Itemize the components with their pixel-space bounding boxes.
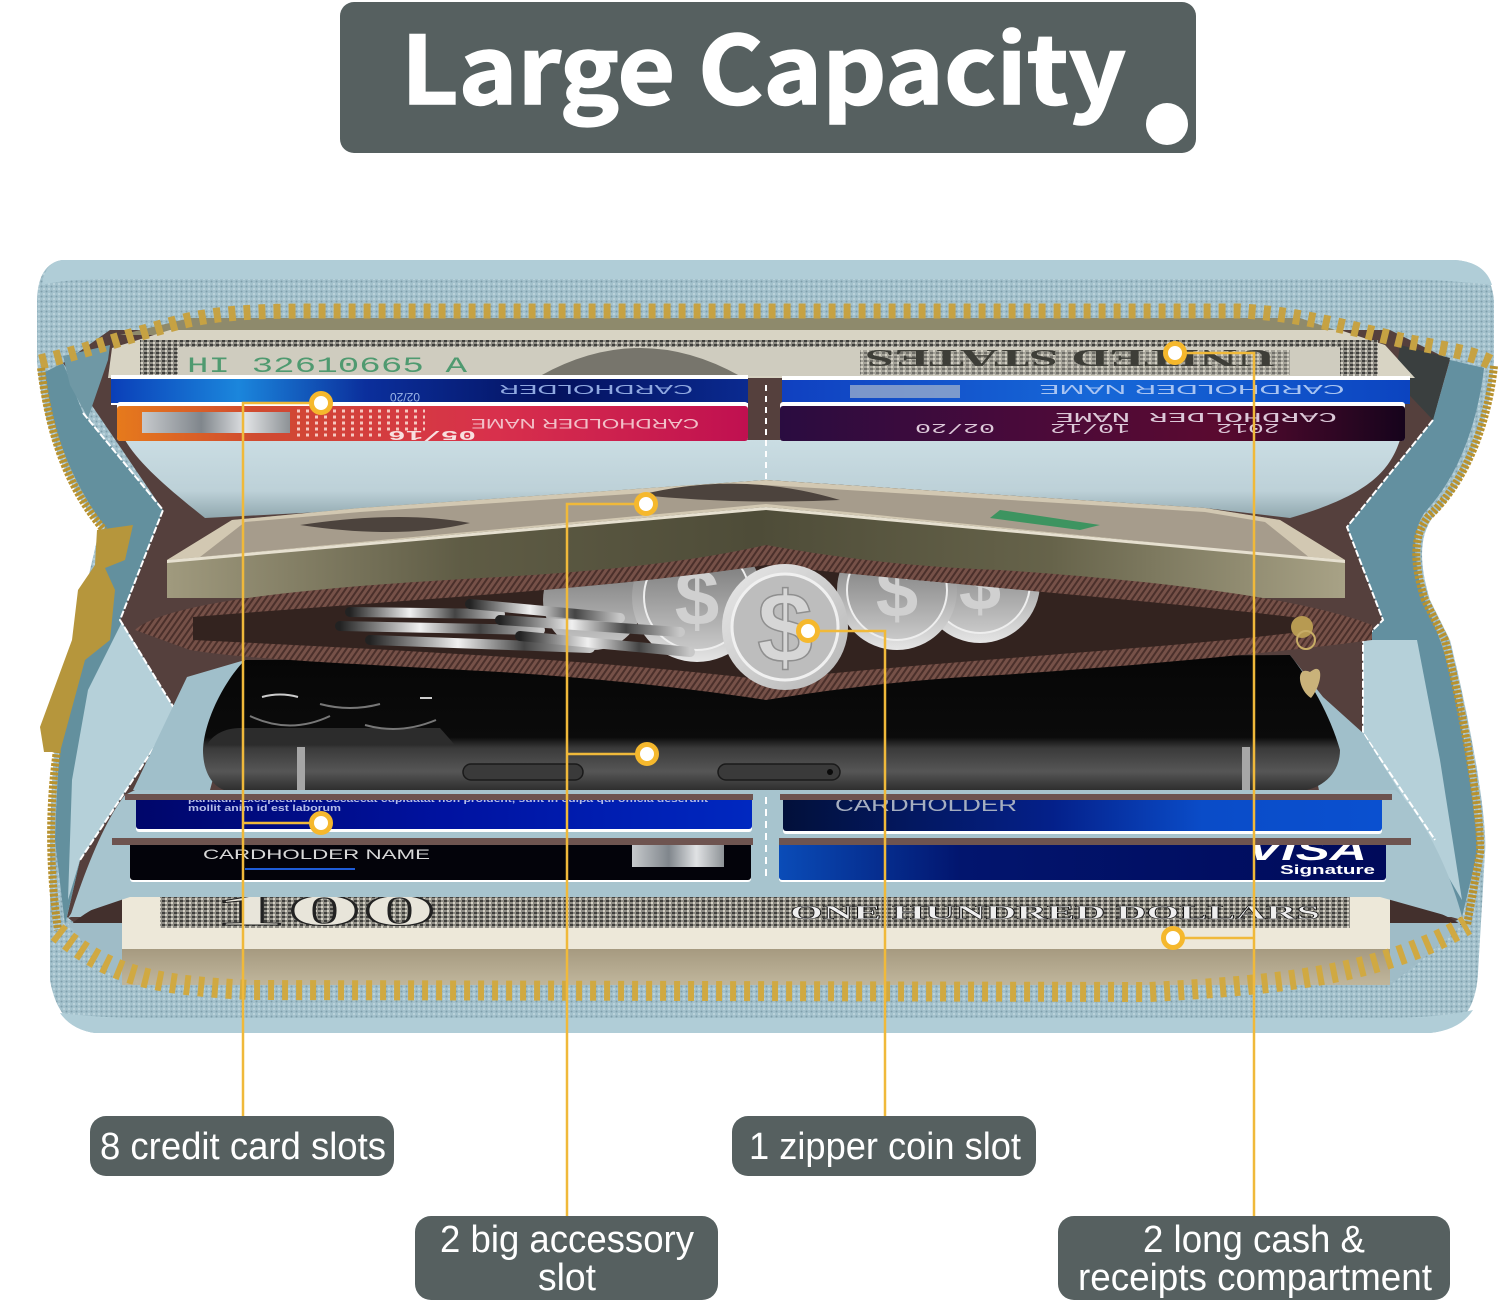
purple card: 02/20 — [915, 419, 995, 435]
pocket interior — [193, 565, 1300, 680]
purple card: 2012 — [1216, 419, 1280, 435]
purple card: 10/12 — [1050, 419, 1130, 435]
wallet illustration — [37, 260, 1494, 1033]
silver coins: $ — [876, 549, 918, 634]
red card: 05/16 — [388, 426, 476, 442]
callout: coin line — [808, 631, 885, 1116]
navy card — [136, 794, 752, 832]
large coin — [722, 564, 848, 690]
title banner: Large Capacity — [401, 0, 1126, 132]
label: 1 zipper coin slot — [732, 1116, 1036, 1176]
zipper coin pocket — [136, 545, 1372, 700]
blue card: CARDHOLDER — [835, 795, 1017, 815]
camera bump — [207, 728, 455, 745]
black card — [130, 840, 751, 882]
blue card — [782, 376, 1410, 404]
blue card: CARDHOLDER — [499, 382, 693, 397]
label: 2 long cash and receipts compartment: 2 long cash & — [1143, 1219, 1365, 1261]
blue card: 02/20 — [390, 390, 420, 404]
pocket tape — [135, 545, 1372, 700]
leather behind phone — [133, 655, 1430, 840]
label: 8 credit card slots: 8 credit card slots — [100, 1126, 386, 1168]
visa card: Signature — [1280, 862, 1375, 877]
top banknote stack — [108, 330, 1415, 379]
lower banknote stack: ONE HUNDRED DOLLARS — [790, 902, 1320, 924]
label: 2 big accessory slot: slot — [538, 1257, 596, 1299]
silver coins — [335, 566, 1040, 662]
purple card — [780, 402, 1405, 441]
lower banknote stack — [68, 883, 1462, 985]
visa card — [779, 834, 1386, 882]
label: 2 long cash and receipts compartment: receipts compartment — [1078, 1257, 1432, 1299]
title banner — [340, 0, 1196, 153]
top panel leather — [125, 440, 1400, 518]
navy card: mollit anim id est laborum — [188, 803, 341, 814]
lower card slots — [70, 790, 1462, 917]
silver coins: $ — [959, 542, 1001, 627]
top stitching — [765, 385, 767, 482]
main zipper pull — [40, 525, 133, 752]
slot edges — [112, 794, 1411, 845]
top banknote stack: UNITED STATES — [865, 344, 1275, 370]
wallet outer shell — [37, 260, 1494, 1033]
label: 8 credit card slots — [90, 1116, 394, 1176]
blue card — [111, 375, 748, 405]
label: 2 big accessory slot: 2 big accessory — [440, 1219, 694, 1261]
blue card: CARDHOLDER NAME — [1039, 382, 1344, 397]
phone — [133, 655, 1430, 840]
black card: CARDHOLDER NAME — [203, 846, 430, 862]
zipper inner lining — [120, 318, 1350, 335]
red card: CARDHOLDER NAME — [471, 416, 699, 432]
callout: credit card lines — [243, 403, 321, 1116]
blue card — [783, 795, 1382, 834]
purple card: CARDHOLDER NAME — [1055, 408, 1337, 424]
callout: accessory lines — [567, 504, 647, 1216]
label: 1 zipper coin slot: 1 zipper coin slot — [749, 1126, 1021, 1168]
right gusset — [1347, 345, 1484, 917]
middle banknote stack — [167, 480, 1345, 598]
visa card: VISA — [1247, 834, 1367, 867]
callout: cash lines — [1173, 353, 1254, 1216]
large coin: $ — [757, 572, 813, 684]
label: 2 long cash and receipts compartment — [1058, 1216, 1450, 1300]
top left cards — [111, 375, 748, 442]
lower banknote stack: 100 — [212, 886, 437, 935]
silver coins: $ — [675, 553, 719, 642]
wallet interior — [63, 330, 1462, 985]
top right cards — [780, 376, 1410, 441]
left gusset — [45, 345, 177, 925]
label: 2 big accessory slot — [415, 1216, 718, 1300]
small zipper pull — [1291, 616, 1320, 698]
top banknote stack: HI 32610665 A — [187, 354, 468, 379]
marker dots — [312, 344, 1184, 948]
red card — [117, 402, 748, 442]
navy card: pariatur. Excepteur sint occaecat cupidatat non proident, sunt in culpa qui officia deserunt — [188, 794, 709, 805]
camera lenses — [250, 694, 436, 729]
zipper teeth — [40, 311, 1494, 992]
